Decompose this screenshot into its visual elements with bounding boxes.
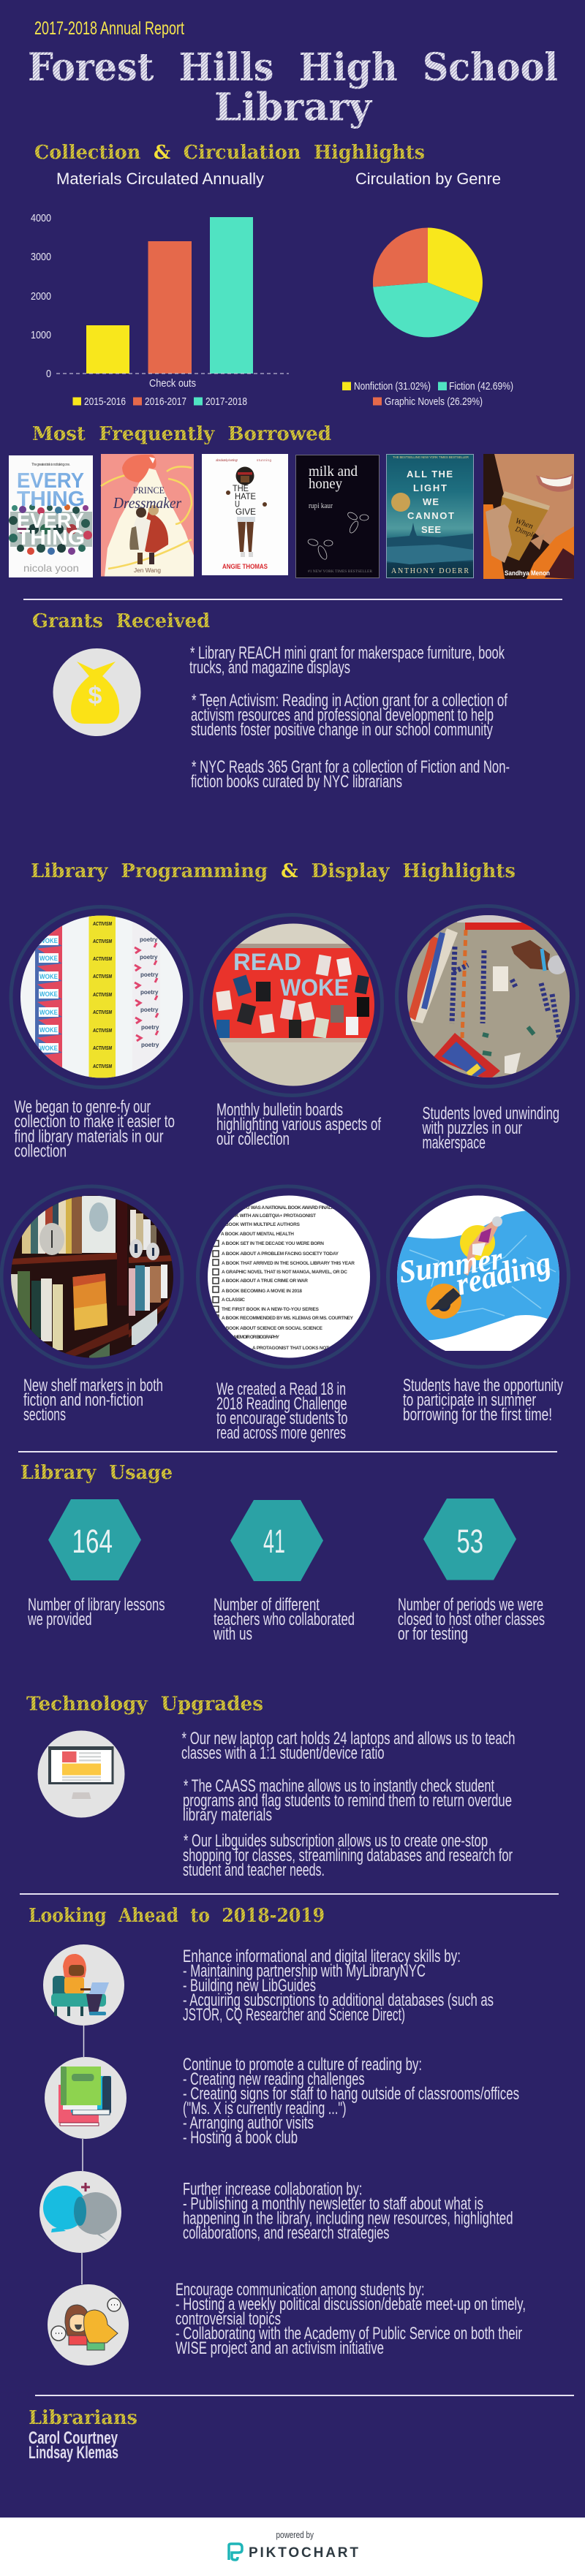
text: technology list: library materials — [183, 1806, 272, 1825]
text: collaboration goals: Further increase collaboration by: — [183, 2180, 363, 2199]
photo: Read 18 in 2018 checklist: A BOOK ABOUT A PROBLEM FACING SOCIETY TODAY — [222, 1251, 339, 1257]
text: technology list — [181, 1729, 515, 1880]
photo: Read 18 in 2018 checklist: A BOOK THAT WAS A NATIONAL BOOK AWARD FINALIST — [221, 1205, 338, 1211]
photo: genre labels: WOKE — [39, 1045, 58, 1053]
text: communication goals — [176, 2280, 526, 2358]
text: grants list — [189, 643, 510, 792]
bar chart legend — [73, 395, 247, 408]
text: puzzles caption: makerspace — [423, 1133, 486, 1153]
photo: shelf markers — [1, 1186, 182, 1367]
book: All the Light We Cannot See: WE — [423, 496, 439, 507]
book: The Prince and the Dressmaker — [101, 454, 194, 576]
footer: powered by Piktochart — [0, 2518, 585, 2576]
photo: genre labels: WOKE — [39, 955, 58, 963]
pie chart legend: Fiction (42.69%) — [449, 380, 513, 393]
photo: genre labels: WOKE — [39, 1026, 58, 1034]
text: bulletin boards caption: highlighting various aspects of — [216, 1115, 381, 1134]
book: All the Light We Cannot See — [386, 455, 474, 577]
book: All the Light We Cannot See: THE BESTSELLING NEW YORK TIMES BESTSELLER — [393, 455, 469, 459]
book: When Dimple Met Rishi: Dimple — [513, 525, 537, 540]
text: communication goals: WISE project and an activism initiative — [176, 2338, 384, 2358]
text: grants list: fiction books curated by NYC librarians — [191, 772, 402, 792]
photo: genre labels: poetry — [140, 989, 159, 996]
text: genre-fy caption: find library materials in our — [15, 1127, 164, 1146]
photo: genre labels — [11, 906, 192, 1088]
text: genre-fy caption: collection to make it easier to — [15, 1112, 175, 1132]
pie chart legend: Nonfiction (31.02%) — [354, 380, 431, 393]
stat: 41 teachers: with us — [213, 1624, 252, 1644]
photo: summer reading graphic — [388, 1186, 569, 1367]
photo: Read 18 in 2018 checklist: A BOOK RECOMMENDED BY MS. KLEMAS OR MS. COURTNEY — [222, 1316, 354, 1321]
book: Everything, Everything: EVERY — [17, 509, 84, 533]
stat: 164 library lessons: we provided — [27, 1610, 92, 1629]
title — [28, 45, 558, 130]
icon: Piktochart logo — [229, 2544, 242, 2560]
book: milk and honey: honey — [309, 476, 342, 492]
photo: Read 18 in 2018 checklist: A BOOK ABOUT MENTAL HEALTH — [221, 1232, 294, 1237]
bar chart legend: 2016-2017 — [145, 395, 186, 408]
text: genre-fy caption: collection — [15, 1142, 67, 1161]
book: milk and honey: rupi kaur — [309, 502, 333, 510]
book: milk and honey: #1 NEW YORK TIMES BESTSELLER — [308, 570, 373, 574]
photo: Read 18 in 2018 checklist: A PROTAGONIST THAT LOOKS NOT — [252, 1346, 329, 1351]
book: Everything, Everything: EVERY — [17, 469, 84, 493]
photo: genre labels: ACTIVISM — [92, 991, 113, 998]
photo: genre labels: ACTIVISM — [92, 1063, 113, 1069]
photo: genre labels: WOKE — [39, 937, 58, 945]
heading: collection and circulation highlights: Collection & Circulation Highlights — [34, 142, 425, 164]
photo: genre labels: ACTIVISM — [92, 938, 113, 944]
heading: librarians: Librarians — [29, 2407, 137, 2429]
photo: genre labels: poetry — [140, 971, 159, 978]
heading: most frequently borrowed: Most Frequently Borrowed — [32, 423, 331, 445]
text: digital literacy goals: JSTOR, CQ Researcher and Science Direct) — [183, 2005, 405, 2025]
book: When Dimple Met Rishi: Sandhya Menon — [505, 569, 550, 577]
photo: genre labels: WOKE — [39, 1009, 58, 1017]
book: All the Light We Cannot See: LIGHT — [413, 482, 447, 493]
stat: 41 teachers: teachers who collaborated — [214, 1610, 355, 1629]
photo: genre labels: poetry — [141, 1042, 159, 1048]
book: All the Light We Cannot See: SEE — [421, 524, 441, 535]
text: culture of reading goals: - Creating new reading challenges — [183, 2069, 364, 2089]
stat: 41 teachers: Number of different — [214, 1595, 320, 1615]
text: reading challenge caption — [216, 1379, 348, 1443]
book: The Hate U Give: absolutely riveting! — [216, 458, 238, 462]
book covers row — [9, 454, 574, 579]
photo: genre labels: ACTIVISM — [92, 1027, 113, 1034]
book: The Prince and the Dressmaker: Dressmaker — [113, 494, 182, 512]
book: The Hate U Give: U — [235, 499, 240, 509]
text: technology list: classes with a 1:1 student/device ratio — [181, 1743, 385, 1763]
text: librarian names: Carol Courtney — [29, 2428, 118, 2448]
photo: genre labels: ACTIVISM — [92, 1009, 113, 1015]
text: culture of reading goals: Continue to promote a culture of reading by: — [183, 2055, 422, 2075]
bar chart: materials circulated annually: Check outs — [149, 377, 196, 390]
text: digital literacy goals: - Building new LibGuides — [183, 1976, 316, 1996]
text: culture of reading goals: - Arranging author visits — [183, 2113, 314, 2133]
photo: genre labels: poetry — [140, 1007, 159, 1013]
stat: 53 periods closed: 53 — [456, 1523, 483, 1560]
book: The Hate U Give: stunning — [257, 458, 271, 462]
photo: Read 18 in 2018 checklist: THE FIRST BOOK IN A NEW-TO-YOU SERIES — [222, 1307, 320, 1312]
text: bulletin boards caption — [216, 1100, 381, 1149]
bar chart: materials circulated annually: 4000 — [31, 212, 51, 224]
text: culture of reading goals: ("Ms. X is currently reading ...") — [183, 2099, 347, 2118]
bar chart legend: 2017-2018 — [205, 395, 247, 408]
icon: money bag: $ — [88, 682, 102, 710]
icon: two students talking — [48, 2284, 129, 2365]
text: shelf markers caption — [23, 1376, 163, 1425]
subtitle: annual report: 2017-2018 Annual Report — [34, 18, 184, 39]
book: The Hate U Give: ANGIE THOMAS — [222, 563, 268, 570]
photo: genre labels: ACTIVISM — [92, 920, 113, 927]
book: The Hate U Give: THE — [233, 483, 249, 493]
pie chart legend — [342, 380, 513, 408]
text: grants list: trucks, and magazine displays — [189, 658, 350, 678]
book: All the Light We Cannot See: CANNOT — [407, 510, 454, 521]
photo: genre labels: poetry — [141, 1024, 159, 1031]
photo: Read 18 in 2018 checklist: A BOOK ABOUT A TRUE CRIME OR WAR — [222, 1278, 308, 1284]
text: puzzles caption: with puzzles in our — [422, 1118, 522, 1138]
stat: 53 periods closed: or for testing — [398, 1624, 468, 1644]
stat: 53 periods closed — [398, 1499, 545, 1644]
book: All the Light We Cannot See: ANTHONY DOERR — [391, 567, 469, 575]
stat: 41 teachers: 41 — [263, 1523, 285, 1560]
footer: powered by Piktochart: PIKTOCHART — [249, 2545, 358, 2561]
bar chart: materials circulated annually: 2000 — [31, 290, 51, 303]
icon: money bag — [53, 648, 140, 736]
bar chart legend: 2015-2016 — [84, 395, 126, 408]
text: librarian names: Lindsay Klemas — [29, 2443, 118, 2463]
photo: genre labels: ACTIVISM — [92, 955, 113, 962]
icon: computer monitor — [38, 1731, 124, 1817]
heading: grants received: Grants Received — [32, 610, 210, 632]
book: milk and honey — [295, 455, 379, 577]
icon: speech bubbles — [39, 2171, 121, 2253]
photo: Read 18 in 2018 checklist — [197, 1186, 379, 1367]
bar chart: materials circulated annually: 1000 — [31, 329, 51, 341]
photo: summer reading graphic: Summer — [397, 1240, 505, 1290]
book: When Dimple Met Rishi — [483, 454, 574, 579]
icon: person with laptop in chair — [43, 1944, 124, 2026]
photo: Read 18 in 2018 checklist: A BOOK BECOMING A MOVIE IN 2018 — [222, 1289, 302, 1294]
title: Forest Hills High School — [28, 45, 558, 90]
photo: Read 18 in 2018 checklist: A BOOK WITH AN LGBTQIA+ PROTAGONIST — [221, 1213, 316, 1219]
text: bulletin boards caption: Monthly bulletin boards — [216, 1100, 343, 1120]
text: librarian names — [29, 2428, 118, 2463]
text: summer borrowing caption: to participate in summer — [403, 1390, 536, 1410]
stat: 164 library lessons: 164 — [72, 1523, 113, 1560]
text: genre-fy caption — [15, 1097, 175, 1161]
text: digital literacy goals: Enhance informational and digital literacy skills by: — [183, 1947, 461, 1966]
book: The Prince and the Dressmaker: Jen Wang — [134, 567, 161, 574]
text: bulletin boards caption: our collection — [216, 1129, 290, 1149]
text: reading challenge caption: read across more genres — [216, 1423, 346, 1443]
bar chart: materials circulated annually — [31, 170, 289, 408]
pie chart: circulation by genre — [342, 170, 513, 408]
icon: stack of books — [45, 2057, 127, 2139]
book: When Dimple Met Rishi: When — [514, 517, 535, 531]
heading: library usage: Library Usage — [20, 1462, 173, 1484]
photo: genre labels: poetry — [140, 954, 158, 961]
footer: powered by Piktochart: powered by — [276, 2529, 314, 2540]
photo: genre labels: WOKE — [39, 973, 58, 981]
text: culture of reading goals — [183, 2055, 519, 2148]
photo: Read 18 in 2018 checklist: A CLASSIC — [222, 1298, 245, 1303]
photo: Read 18 in 2018 checklist: A GRAPHIC NOVEL THAT IS NOT MANGA, MARVEL, OR DC — [222, 1270, 347, 1275]
photo: Read Woke bulletin board — [202, 915, 382, 1095]
stat: 41 teachers — [213, 1500, 355, 1644]
book: The Prince and the Dressmaker: PRINCE — [133, 485, 165, 496]
book: All the Light We Cannot See: ALL THE — [407, 469, 453, 480]
bar chart: materials circulated annually: 3000 — [31, 251, 51, 263]
text: technology list: student and teacher needs. — [183, 1860, 325, 1880]
book: Everything, Everything — [9, 455, 93, 577]
photo: genre labels: poetry — [140, 936, 158, 943]
text: shelf markers caption: New shelf markers in both — [23, 1376, 163, 1395]
text: digital literacy goals — [183, 1947, 494, 2025]
photo: Read 18 in 2018 checklist: A BOOK ABOUT SCIENCE OR SOCIAL SCIENCE — [222, 1326, 323, 1331]
text: reading challenge caption: 2018 Reading Challenge — [216, 1394, 347, 1414]
photo: Read Woke bulletin board: WOKE — [280, 974, 349, 1001]
text: shelf markers caption: fiction and non-fiction — [23, 1390, 143, 1410]
pie chart title: Circulation by Genre — [355, 170, 501, 188]
photo: Read 18 in 2018 checklist: MEMOIR OR BIOGRAPHY — [234, 1335, 280, 1340]
text: digital literacy goals: - Maintaining partnership with MyLibraryNYC — [183, 1961, 426, 1981]
text: reading challenge caption: to encourage students to — [216, 1409, 348, 1428]
photo: makerspace puzzle — [396, 906, 578, 1086]
book: milk and honey: milk and — [309, 463, 358, 480]
photo: Read 18 in 2018 checklist: A BOOK SET IN THE DECADE YOU WERE BORN — [222, 1241, 324, 1246]
text: genre-fy caption: We began to genre-fy our — [15, 1097, 151, 1117]
bar chart title: Materials Circulated Annually — [56, 170, 264, 188]
text: communication goals: controversial topics — [176, 2309, 281, 2329]
stat: 164 library lessons — [27, 1499, 165, 1629]
text: communication goals: Encourage communication among students by: — [176, 2280, 424, 2300]
photo: summer reading graphic: reading — [453, 1244, 554, 1303]
photo: genre labels: ACTIVISM — [92, 1045, 113, 1051]
title: Library — [214, 85, 373, 130]
text: summer borrowing caption — [403, 1376, 563, 1425]
book: The Hate U Give — [202, 454, 288, 575]
text: collaboration goals — [183, 2180, 513, 2243]
heading: library programming and display highlights: Library Programming & Display Highlights — [31, 860, 516, 882]
photo: genre labels: ACTIVISM — [92, 973, 113, 980]
photo: Read Woke bulletin board: READ — [233, 949, 301, 975]
photo: Read 18 in 2018 checklist: A BOOK WITH MULTIPLE AUTHORS — [221, 1222, 301, 1227]
text: collaboration goals: collaborations, and research strategies — [183, 2224, 389, 2243]
text: reading challenge caption: We created a Read 18 in — [216, 1379, 346, 1399]
stat: 164 library lessons: Number of library lessons — [28, 1595, 165, 1615]
book: Everything, Everything: THING — [17, 488, 85, 511]
heading: technology upgrades: Technology Upgrades — [26, 1693, 263, 1715]
photo: Read 18 in 2018 checklist: A BOOK THAT ARRIVED IN THE SCHOOL LIBRARY THIS YEAR — [222, 1261, 355, 1266]
book: Everything, Everything: nicola yoon — [23, 562, 79, 574]
text: puzzles caption — [422, 1104, 559, 1153]
book: The Hate U Give: HATE — [235, 491, 256, 501]
pie chart legend: Graphic Novels (26.29%) — [385, 395, 483, 408]
book: Everything, Everything: THING — [17, 526, 85, 550]
book: Everything, Everything: The greatest risk is not taking one. — [31, 463, 70, 467]
heading: looking ahead: Looking Ahead to 2018-2019 — [29, 1905, 325, 1927]
photo: genre labels: WOKE — [39, 990, 58, 999]
text: culture of reading goals: - Hosting a book club — [183, 2128, 298, 2148]
text: shelf markers caption: sections — [23, 1405, 66, 1425]
bar chart: materials circulated annually: 0 — [46, 368, 51, 380]
book: The Hate U Give: GIVE — [235, 507, 256, 517]
